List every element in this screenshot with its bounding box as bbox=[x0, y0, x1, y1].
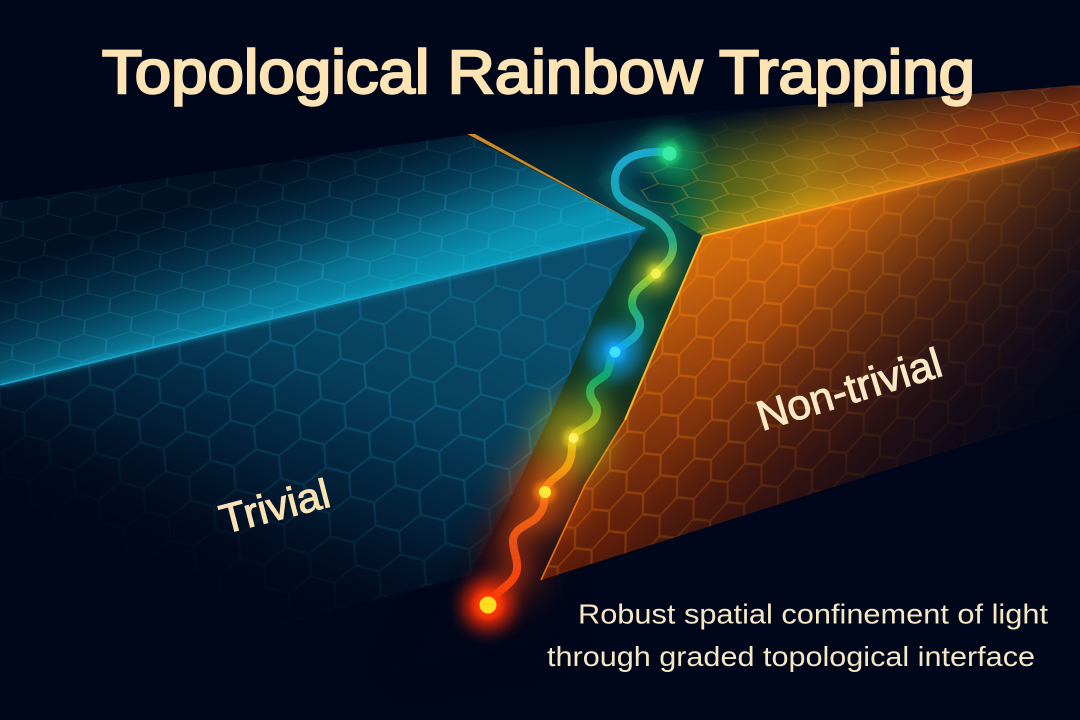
shadow around lower channel bbox=[400, 470, 560, 670]
dot: yellow trapped light lower bbox=[564, 428, 584, 448]
edge: orange interface line bbox=[467, 134, 645, 228]
caption: Robust spatial confinement of light bbox=[578, 598, 1048, 630]
edge: non-trivial bright edge bbox=[541, 144, 1080, 580]
title: Topological Rainbow Trapping bbox=[102, 38, 975, 106]
panel: trivial top face bbox=[0, 135, 645, 385]
panel: trivial front face bbox=[0, 228, 645, 692]
caption bbox=[547, 598, 1048, 672]
label: Trivial: Trivial bbox=[215, 470, 335, 543]
caption: through graded topological interface bbox=[547, 641, 1035, 672]
panel: graded interface channel bbox=[480, 170, 703, 600]
dot: yellow trapped light upper bbox=[647, 264, 665, 282]
edge: trivial cyan edge bbox=[0, 228, 645, 385]
dot: green trapped light bbox=[657, 141, 681, 165]
rainbow glow behind waveguide bbox=[462, 127, 699, 631]
dot: red trapped light bbox=[473, 590, 503, 620]
panel: non-trivial front face bbox=[541, 145, 1080, 580]
dot: amber trapped light bbox=[534, 481, 556, 503]
panel: non-trivial top face bbox=[640, 85, 1080, 236]
waveguide: rainbow light path bbox=[488, 152, 673, 605]
panel: dark teal middle of top surface bbox=[480, 115, 730, 226]
dot: blue trapped light bbox=[604, 341, 626, 363]
label: Non-trivial: Non-trivial bbox=[751, 339, 947, 440]
